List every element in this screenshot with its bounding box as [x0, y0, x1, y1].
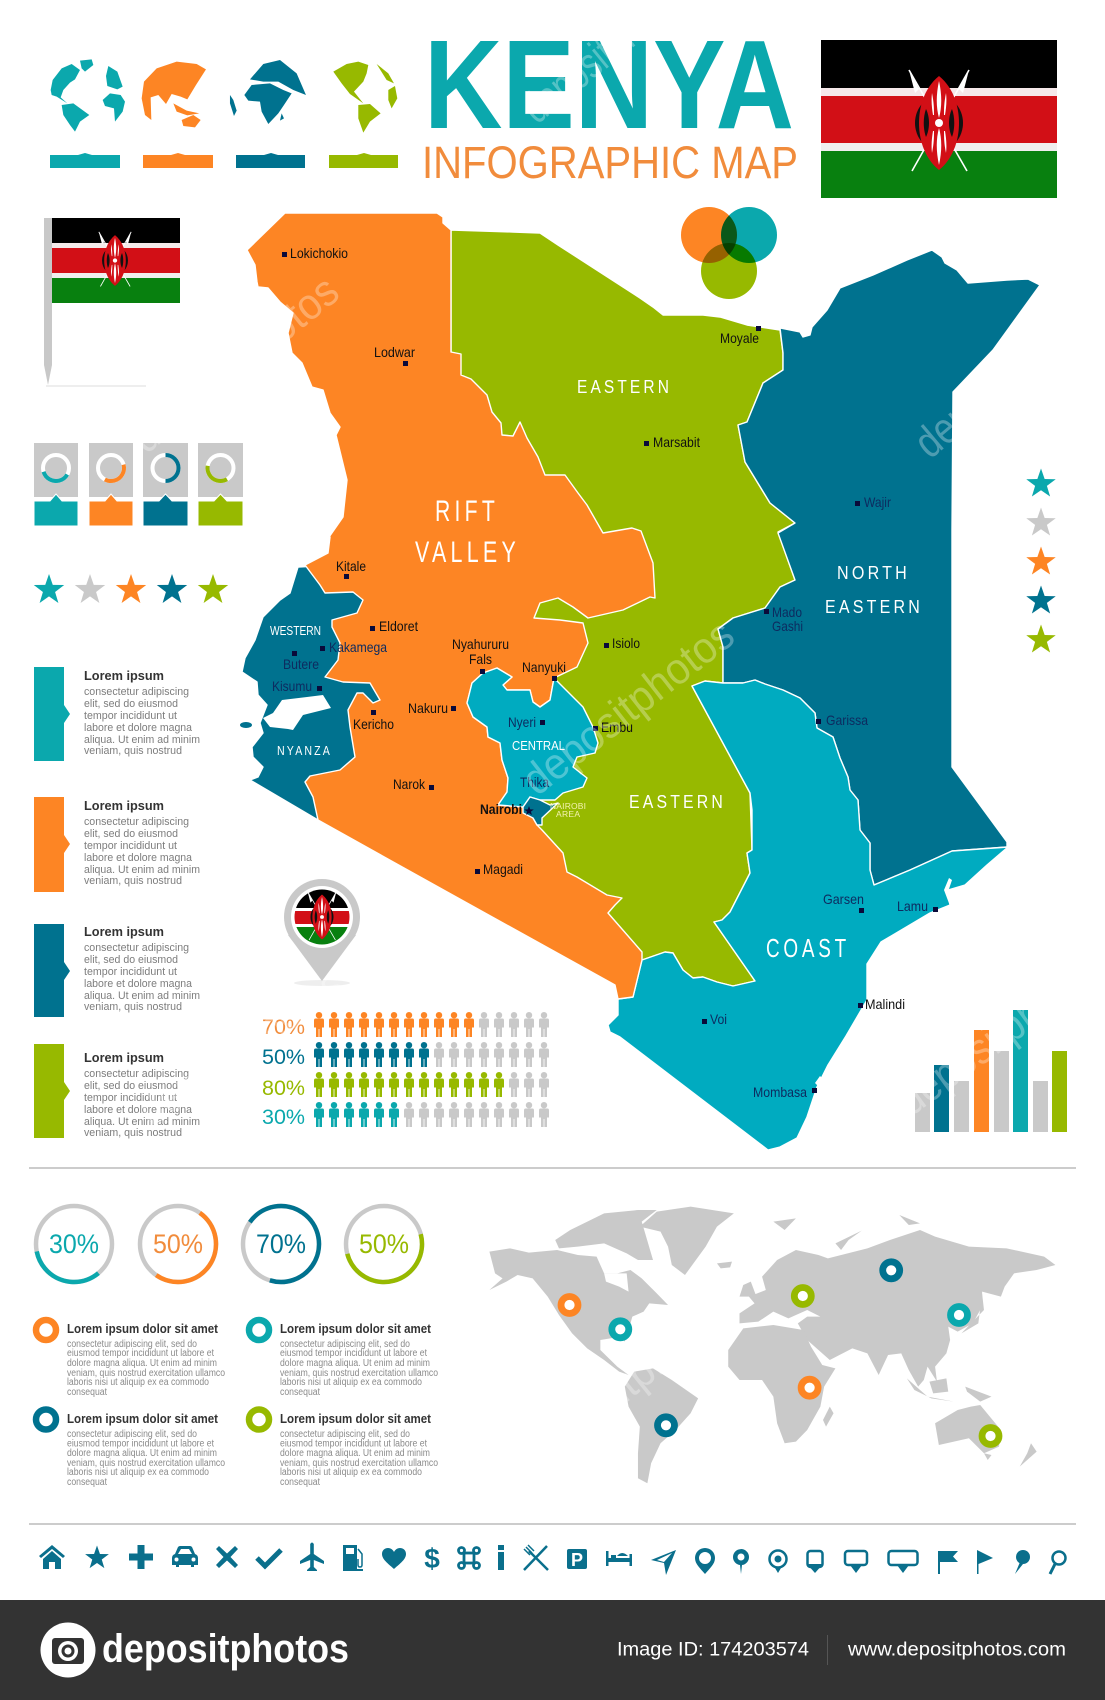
world map	[489, 1207, 1055, 1483]
info block: teal: veniam, quis nostrud exercitation ullamco	[280, 1368, 438, 1379]
tile: orange	[89, 443, 133, 526]
watermarks: depositphotos	[130, 960, 353, 1136]
donut charts	[20, 1190, 431, 1298]
info block: blue	[36, 1410, 225, 1488]
legend text block 1: veniam, quis nostrud	[84, 745, 182, 757]
icon: car	[172, 1546, 198, 1567]
icon: slim pin	[733, 1549, 749, 1574]
info block: teal: dolore magna aliqua. Ut enim ad minim	[280, 1358, 430, 1369]
info block: orange: veniam, quis nostrud exercitation ullamco	[67, 1368, 225, 1379]
region names	[270, 377, 923, 963]
city names: Kericho	[353, 716, 394, 732]
info block: teal: consequat	[280, 1387, 320, 1398]
info block: green: eiusmod tempor incididunt ut labore et	[280, 1438, 427, 1450]
city names: Lodwar	[374, 344, 415, 360]
legend text block 3: veniam, quis nostrud	[84, 1001, 182, 1013]
icon: bed	[606, 1551, 632, 1566]
flag location pin	[284, 879, 360, 986]
city names: Mombasa	[753, 1084, 807, 1100]
row: 30%: 30%	[262, 1106, 305, 1129]
info block: green: consequat	[280, 1477, 320, 1488]
tile: teal	[34, 443, 78, 526]
icon: home	[39, 1545, 65, 1569]
city names: Nyahururu	[452, 636, 509, 652]
progress tiles	[34, 443, 243, 526]
map of Kenya	[240, 213, 1040, 1150]
info block: orange: eiusmod tempor incididunt ut labore et	[67, 1348, 214, 1359]
city names: Embu	[601, 719, 633, 735]
city markers	[282, 252, 938, 1093]
legend text block 2	[34, 797, 200, 892]
city names: Magadi	[483, 861, 523, 877]
city names: Kisumu	[272, 678, 312, 694]
legend text block 4: elit, sed do eiusmod	[84, 1080, 178, 1092]
row of globes	[51, 59, 397, 133]
city names: Gashi	[772, 618, 803, 634]
icon: parking: P	[571, 1550, 583, 1570]
row: 50%	[262, 1042, 549, 1069]
info block: teal	[249, 1320, 438, 1398]
icon: heart	[382, 1548, 406, 1569]
info block: teal: Lorem ipsum dolor sit amet	[280, 1322, 432, 1336]
row: 50%: 50%	[262, 1046, 305, 1069]
pictogram chart	[262, 1012, 549, 1129]
info block: blue: eiusmod tempor incididunt ut labore et	[67, 1438, 214, 1450]
capital star	[524, 806, 534, 815]
icon: wide balloon	[888, 1551, 918, 1573]
icon: medium balloon	[845, 1551, 867, 1573]
info block: orange	[36, 1320, 225, 1398]
region: Nairobi	[523, 797, 558, 825]
info block: green: Lorem ipsum dolor sit amet	[280, 1412, 432, 1426]
info block: teal: eiusmod tempor incididunt ut labore et	[280, 1348, 427, 1359]
info block: green	[249, 1410, 438, 1488]
legend text block 2: veniam, quis nostrud	[84, 875, 182, 887]
star rating row	[34, 574, 228, 603]
icon: square balloon	[807, 1551, 823, 1573]
info block: orange: consequat	[67, 1387, 107, 1398]
icon: pushpin	[1015, 1550, 1030, 1574]
legend text block 1: Lorem ipsum	[84, 668, 164, 683]
city names: Malindi	[865, 996, 905, 1012]
icon: check	[257, 1550, 281, 1566]
legend text block 1: aliqua. Ut enim ad minim	[84, 734, 200, 746]
info block: orange: laboris nisi ut aliquip ex ea commodo	[67, 1377, 209, 1388]
region names: VALLEY	[415, 536, 520, 569]
watermarks: depositphotos	[513, 610, 743, 805]
city names: Voi	[710, 1011, 727, 1027]
icon: magnifier	[1050, 1552, 1066, 1574]
region names: EASTERN	[825, 597, 923, 617]
legend text block 2: elit, sed do eiusmod	[84, 828, 178, 840]
legend text block 2: aliqua. Ut enim ad minim	[84, 864, 200, 876]
legend text block 4: labore et dolore magna	[84, 1104, 193, 1116]
icon: flag	[938, 1551, 958, 1574]
region: Western and Nyanza	[242, 565, 385, 820]
title: KENYA	[424, 14, 794, 155]
icon: pennant	[977, 1550, 993, 1574]
row: 80%: 80%	[262, 1077, 305, 1100]
footer url: www.depositphotos.com	[847, 1640, 1066, 1660]
donut: 70%: 70%	[256, 1229, 306, 1259]
region names: NAIROBI	[550, 801, 586, 811]
legend text block 1	[34, 667, 200, 761]
globe: teal	[51, 59, 125, 132]
tile: green	[198, 443, 243, 526]
image id: Image ID: 174203574	[617, 1640, 809, 1660]
legend text block 4: consectetur adipiscing	[84, 1068, 189, 1080]
row: 80%	[262, 1072, 549, 1100]
legend text block 1: labore et dolore magna	[84, 722, 193, 734]
city names: Lamu	[897, 898, 928, 914]
region: Coast	[608, 680, 1008, 1150]
info block: blue: consequat	[67, 1477, 107, 1488]
city names: Moyale	[720, 330, 759, 346]
footer logo: depositphotos	[102, 1627, 349, 1671]
info block: teal: consectetur adipiscing elit, sed do	[280, 1339, 410, 1350]
watermarks: depositphotos	[121, 266, 348, 463]
region names: EASTERN	[629, 792, 726, 812]
city names: Garsen	[823, 891, 864, 907]
region: Central	[467, 668, 598, 807]
icon: airplane	[300, 1542, 324, 1571]
city names: Nyeri	[508, 714, 536, 730]
region names: CENTRAL	[512, 738, 565, 753]
info block: green: veniam, quis nostrud exercitation ullamco	[280, 1458, 438, 1469]
legend text block 3: elit, sed do eiusmod	[84, 954, 178, 966]
icon: parking	[567, 1549, 587, 1570]
info block: orange: dolore magna aliqua. Ut enim ad minim	[67, 1358, 217, 1369]
info block: green: consectetur adipiscing elit, sed do	[280, 1429, 410, 1440]
city names: Mado	[772, 604, 802, 620]
info block: orange: Lorem ipsum dolor sit amet	[67, 1322, 219, 1336]
city names: Nanyuki	[522, 659, 566, 675]
footer bar	[0, 1600, 1105, 1700]
icon: navigation arrow	[651, 1550, 676, 1575]
legend text block 4	[34, 1044, 200, 1139]
flag on pole	[44, 218, 180, 387]
legend text block 1: consectetur adipiscing	[84, 686, 189, 698]
region names: WESTERN	[270, 624, 321, 638]
map labels and city markers	[270, 245, 938, 1100]
legend text block 3: consectetur adipiscing	[84, 942, 189, 954]
region names: AREA	[556, 809, 580, 819]
world map location markers	[561, 1262, 999, 1444]
globe caption bars	[50, 153, 398, 168]
icon: command	[458, 1548, 480, 1568]
region: Eastern	[451, 230, 795, 986]
region names: NYANZA	[277, 743, 332, 758]
tile: blue	[143, 443, 188, 526]
city names: Garissa	[826, 712, 868, 728]
legend text block 3: aliqua. Ut enim ad minim	[84, 990, 200, 1002]
city names: Kitale	[336, 558, 366, 574]
watermarks: depositphotos	[512, 1282, 744, 1483]
footer logo	[40, 1622, 349, 1678]
legend text block 4: veniam, quis nostrud	[84, 1127, 182, 1139]
icon row	[39, 1542, 1066, 1575]
icon: information	[498, 1545, 504, 1570]
city names: Fals	[469, 651, 492, 667]
region names: RIFT	[435, 495, 499, 528]
donut: 50%	[125, 1191, 231, 1297]
city names: Thika	[520, 774, 549, 790]
city names: Lokichokio	[290, 245, 348, 261]
city names: Wajir	[864, 494, 891, 510]
legend text block 2: consectetur adipiscing	[84, 816, 189, 828]
city names: Nairobi	[480, 801, 522, 817]
globe: green	[333, 62, 397, 133]
region names: NORTH	[837, 563, 910, 583]
legend text block 3: tempor incididunt ut	[84, 966, 177, 978]
info block: teal: laboris nisi ut aliquip ex ea commodo	[280, 1377, 422, 1388]
row: 70%	[262, 1012, 549, 1039]
region: North Eastern	[718, 250, 1040, 885]
icon: map pin ring	[695, 1548, 715, 1574]
legend text block 4: aliqua. Ut enim ad minim	[84, 1116, 200, 1128]
info block: blue: Lorem ipsum dolor sit amet	[67, 1412, 219, 1426]
info block: green: dolore magna aliqua. Ut enim ad minim	[280, 1448, 430, 1459]
legend text block 2: Lorem ipsum	[84, 798, 164, 813]
region: Rift Valley	[247, 213, 655, 999]
legend text block 3: Lorem ipsum	[84, 924, 164, 939]
region names: COAST	[766, 933, 850, 963]
icon: target pin	[770, 1550, 786, 1573]
legend text block 3	[34, 924, 200, 1017]
overlapping circles	[681, 207, 777, 299]
globe: blue	[230, 60, 306, 124]
star column right	[1026, 468, 1056, 653]
city names: Butere	[283, 656, 319, 672]
globe: orange	[142, 62, 206, 127]
city names: Narok	[393, 776, 426, 792]
info block: orange: consectetur adipiscing elit, sed do	[67, 1339, 197, 1350]
city names: Kakamega	[329, 639, 387, 655]
icon: plus	[129, 1545, 153, 1569]
donut: 50% green	[337, 1197, 431, 1291]
city names: Nakuru	[408, 700, 448, 716]
legend text block 4: tempor incididunt ut	[84, 1092, 177, 1104]
donut: 70%	[228, 1191, 334, 1297]
row: 30%	[262, 1102, 549, 1129]
legend text block 2: labore et dolore magna	[84, 852, 193, 864]
subtitle: INFOGRAPHIC MAP	[422, 137, 798, 188]
city names: Isiolo	[612, 635, 640, 651]
city names: Marsabit	[653, 434, 700, 450]
icon: dollar: $	[424, 1543, 440, 1574]
lake and island	[240, 695, 953, 1086]
region names: EASTERN	[577, 377, 672, 397]
info block: blue: veniam, quis nostrud exercitation ullamco	[67, 1458, 225, 1469]
donut: 50%: 50%	[153, 1229, 203, 1259]
icon: cutlery	[524, 1545, 548, 1570]
info block: blue: laboris nisi ut aliquip ex ea commodo	[67, 1467, 209, 1478]
donut: 50% green: 50%	[359, 1229, 409, 1259]
icon: fuel pump	[343, 1545, 363, 1571]
icon: close	[216, 1546, 238, 1568]
city names: Eldoret	[379, 618, 418, 634]
flag: large Kenya flag	[821, 40, 1057, 198]
legend text block 4: Lorem ipsum	[84, 1050, 164, 1065]
info block: blue: dolore magna aliqua. Ut enim ad minim	[67, 1448, 217, 1459]
legend text block 3: labore et dolore magna	[84, 978, 193, 990]
watermarks	[121, 0, 1105, 1483]
donut: 30%: 30%	[49, 1229, 99, 1259]
info block: green: laboris nisi ut aliquip ex ea commodo	[280, 1467, 422, 1478]
donut: 30%	[20, 1190, 128, 1298]
legend text block 1: elit, sed do eiusmod	[84, 698, 178, 710]
legend text block 1: tempor incididunt ut	[84, 710, 177, 722]
city names	[272, 245, 928, 1100]
info block: blue: consectetur adipiscing elit, sed do	[67, 1429, 197, 1440]
legend text block 2: tempor incididunt ut	[84, 840, 177, 852]
row: 70%: 70%	[262, 1016, 305, 1039]
icon: star	[85, 1546, 109, 1568]
bar chart	[915, 1010, 1067, 1132]
